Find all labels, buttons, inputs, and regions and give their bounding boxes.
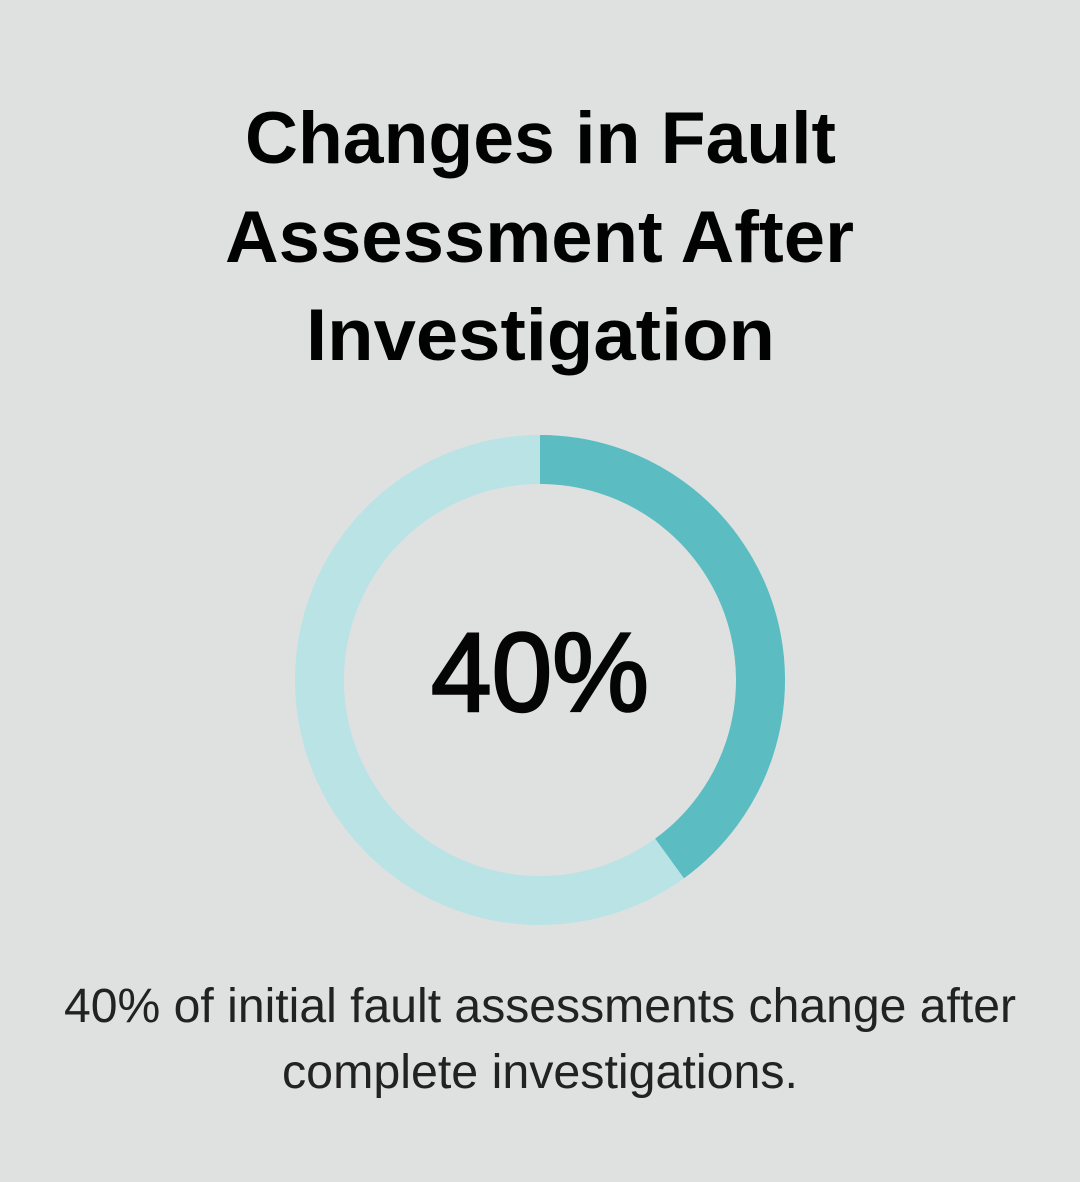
title: Assessment After [225,197,854,278]
description [64,980,1016,1099]
description: complete investigations. [282,1046,798,1099]
donut value: 40% [431,610,649,735]
title: Changes in Fault [245,98,836,179]
description: 40% of initial fault assessments change after [64,980,1016,1033]
donut chart: 40 percent [320,460,761,900]
title: Investigation [306,295,775,376]
title [225,98,854,376]
